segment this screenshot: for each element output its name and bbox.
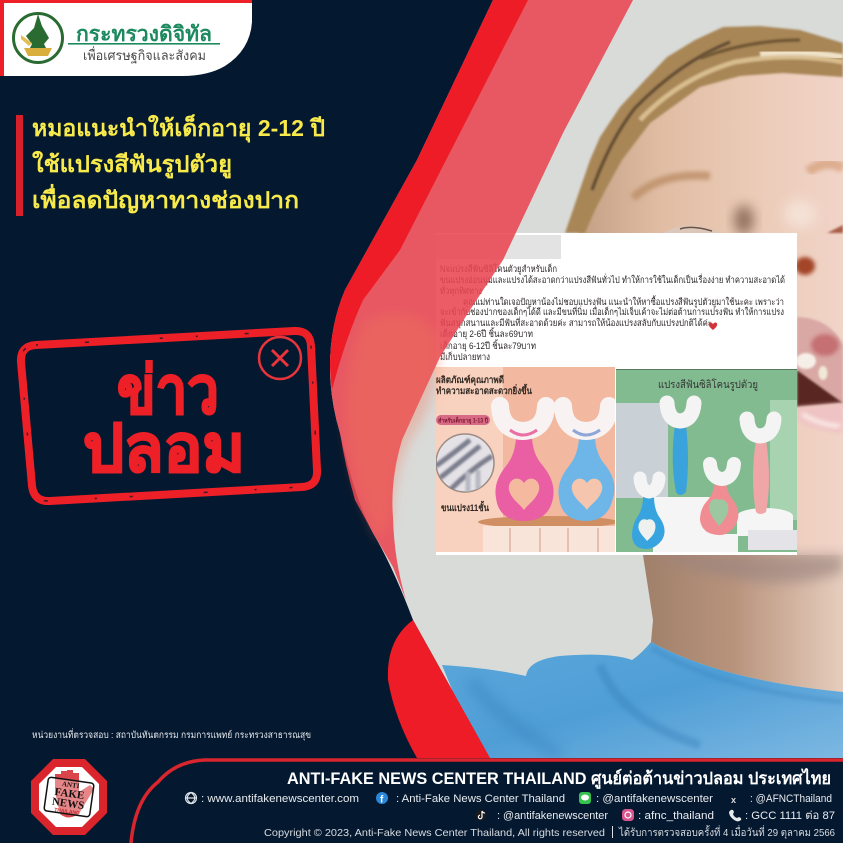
post text: Nจแปรงสีฟันซิลิโคนตัวยูสำหรับเด็ก — [440, 262, 557, 275]
fake news stamp — [21, 331, 317, 501]
panel heading: แปรงสีฟันซิลิโคนรูปตัวยู — [658, 378, 758, 391]
post text — [440, 262, 785, 362]
contact row 1: : www.antifakenewscenter.com — [201, 793, 359, 805]
title text: หมอแนะนำให้เด็กอายุ 2-12 ปี — [32, 113, 325, 143]
post text: ฟันสนุกสนานและมีฟันที่สะอาดด้วยค่ะ สามารถให้น้องแปรงสลับกับแปรงปกติได้ค่ะ — [440, 316, 712, 329]
post text: ทั่วทุกทิศทาง — [440, 284, 482, 297]
product photo: peach panel — [436, 367, 618, 552]
ear tint in swoosh — [345, 313, 440, 540]
copyright line: Copyright © 2023, Anti-Fake News Center Thailand, All rights reserved — [264, 827, 605, 839]
product photo: green panel — [616, 367, 797, 552]
post text: จะเข้ากับช่องปากของเด็กๆได้ดี และมีขนที่นิ่ม เมื่อเด็กๆไม่เจ็บเค้าจะไม่ต่อต้านการแปรงฟัน ทำให้การแปรง — [440, 305, 784, 317]
icon: facebook — [376, 792, 388, 806]
title text — [32, 113, 325, 214]
shirt — [442, 642, 843, 758]
eyebrows and eye shadows — [633, 164, 843, 235]
post text: มีเก็บปลายทาง — [440, 350, 490, 362]
post text: คุณแม่ท่านใดเจอปัญหาน้องไม่ชอบแปรงฟัน แนะนำให้หาซื้อแปรงสีฟันรูปตัวยูมาใช้นะคะ เพราะว่า — [463, 294, 784, 308]
stamp text: ข่าว — [117, 353, 219, 427]
blue brush — [558, 406, 614, 521]
hair — [565, 26, 843, 233]
contact row 2: : GCC 1111 ต่อ 87 — [745, 810, 835, 822]
stamp text — [83, 353, 245, 485]
stamp X circle — [259, 337, 301, 379]
logo label: FAKE — [54, 786, 85, 802]
panel captions: ทำความสะอาดสะดวกยิ่งขึ้น — [436, 383, 532, 397]
contact row 2: : afnc_thailand — [638, 810, 714, 822]
stamp text: ปลอม — [83, 411, 245, 485]
blurred profile block — [436, 235, 561, 259]
small blue brush — [632, 478, 665, 549]
stamp frame — [21, 331, 317, 501]
icon: line — [579, 792, 591, 804]
contact row 2: : @antifakenewscenter — [497, 810, 608, 822]
salmon translucent swoosh — [330, 0, 633, 600]
logo label: NEWS — [51, 796, 85, 812]
contact row 1: : @antifakenewscenter — [596, 793, 713, 805]
small pink brush — [700, 464, 738, 535]
neck — [643, 555, 843, 692]
ministry name: กระทรวงดิจิทัล — [76, 23, 212, 46]
panel captions: สำหรับเด็กอายุ 1-13 ปี — [438, 416, 488, 424]
post text: เด็กอายุ 2-6ปี ชิ้นละ69บาท — [440, 326, 533, 340]
white podiums — [653, 497, 797, 552]
nose and mouth — [795, 257, 843, 433]
hand — [55, 770, 94, 818]
logo label: ANTI — [61, 780, 80, 790]
shirt collar folds — [470, 648, 843, 755]
post text: เด็กอายุ 6-12ปี ชิ้นละ79บาท — [440, 338, 536, 352]
title text: เพื่อลดปัญหาทางช่องปาก — [32, 183, 299, 214]
lower red shape — [388, 620, 490, 758]
icon: phone — [729, 810, 741, 821]
logo label — [44, 777, 94, 818]
copyright line — [264, 825, 835, 839]
footer heading: ANTI-FAKE NEWS CENTER THAILAND ศูนย์ต่อต้านข่าวปลอม ประเทศไทย — [287, 768, 831, 790]
panel captions — [436, 374, 532, 514]
ministry slogan: เพื่อเศรษฐกิจและสังคม — [83, 46, 206, 64]
pasted screenshot of post — [436, 233, 797, 555]
chin shadow — [650, 555, 843, 583]
panel captions: ขนแปรง11ชั้น — [441, 500, 489, 514]
panel captions: ผลิตภัณฑ์คุณภาพดี — [436, 374, 504, 386]
contact row 2 — [476, 809, 835, 822]
icon: heart — [709, 322, 717, 330]
stamp wear marks — [21, 331, 317, 501]
contact row 1: : @AFNCThailand — [750, 793, 832, 805]
icon: X: x — [731, 795, 736, 805]
red title bar — [16, 115, 23, 216]
icon: facebook: f — [380, 794, 384, 806]
red frame of logo panel — [0, 0, 252, 76]
anti-fake news logo — [31, 759, 107, 835]
contact row 1 — [186, 792, 832, 806]
logo label: THAILAND — [54, 807, 80, 817]
footer band — [131, 760, 843, 843]
post text: ขนแปรงอ่อนนุ่มและแปรงได้สะอาดกว่าแปรงสีฟันทั่วไป ทำให้การใช้ในเด็กเป็นเรื่องง่าย ทำความสะอาดได้ — [440, 273, 785, 286]
title block — [16, 113, 325, 216]
icon: tiktok — [476, 810, 486, 820]
title text: ใช้แปรงสีฟันรูปตัวยู — [32, 150, 232, 179]
face — [578, 60, 843, 555]
logo divider — [68, 43, 220, 45]
tall pink brush — [747, 419, 774, 514]
photo: child brushing teeth — [330, 0, 843, 760]
source note: หน่วยงานที่ตรวจสอบ : สถาบันทันตกรรม กรมการแพทย์ กระทรวงสาธารณสุข — [32, 728, 311, 741]
logo panel — [0, 0, 252, 76]
solid red band — [330, 0, 528, 390]
pink brush — [495, 406, 554, 521]
pedestal — [478, 516, 618, 552]
icon: instagram — [622, 809, 634, 821]
emblem — [14, 14, 62, 62]
tall blue brush — [667, 403, 694, 495]
icon: globe — [186, 792, 196, 804]
contact row 1: : Anti-Fake News Center Thailand — [396, 793, 565, 805]
bristle inset — [436, 434, 494, 492]
